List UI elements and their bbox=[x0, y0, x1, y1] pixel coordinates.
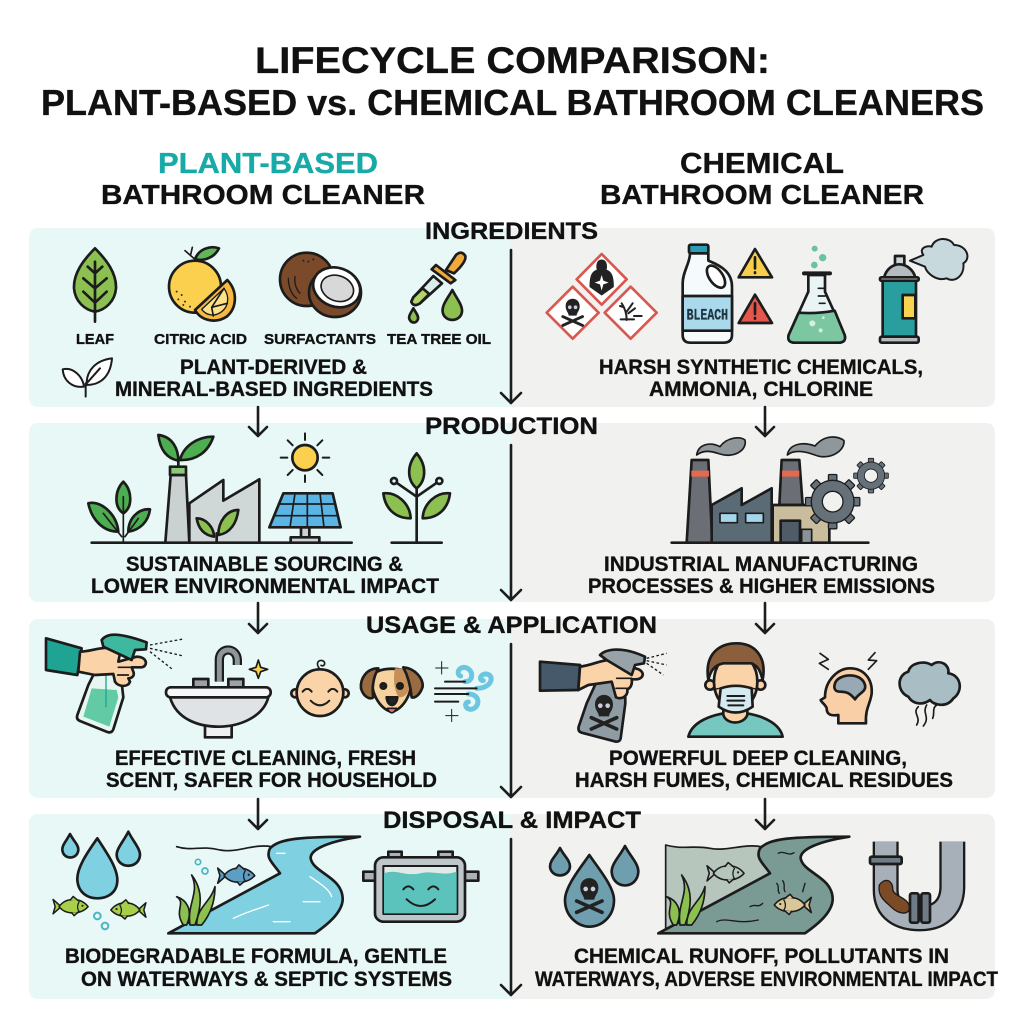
text: sustainable sourcing: LOWER ENVIRONMENTAL IMPACT bbox=[91, 575, 439, 598]
icon: bleach bottle: BLEACH bbox=[687, 307, 728, 325]
heading: chemical column bbox=[600, 148, 924, 210]
icon: fresh air wind bbox=[435, 662, 491, 722]
icon: polluting factory bbox=[687, 437, 844, 543]
icon: hazard diamonds bbox=[547, 254, 657, 339]
icon: polluted river bbox=[658, 837, 849, 933]
text: effective cleaning: EFFECTIVE CLEANING, FRESH bbox=[115, 747, 416, 770]
heading: plant-based column: BATHROOM CLEANER bbox=[101, 179, 425, 210]
icon: person with mask bbox=[688, 643, 783, 737]
icon: baby bbox=[291, 660, 349, 716]
panel: chemical disposal bbox=[511, 814, 998, 999]
section label: production: PRODUCTION bbox=[425, 413, 598, 440]
labels: ingredients bbox=[76, 331, 491, 348]
text: chemical runoff: CHEMICAL RUNOFF, POLLUTANTS IN bbox=[574, 945, 949, 968]
icon: dog bbox=[361, 667, 423, 713]
icon: green factory bbox=[158, 435, 259, 543]
icon: hand with green spray bottle bbox=[46, 635, 183, 732]
icon: seedling bbox=[383, 453, 450, 543]
section label: ingredients: INGREDIENTS bbox=[425, 218, 598, 245]
arrows: left column steps bbox=[249, 407, 267, 829]
text: sustainable sourcing: SUSTAINABLE SOURCING & bbox=[126, 553, 403, 576]
icon: toxic drops bbox=[550, 846, 638, 927]
icon: sprout outline bbox=[63, 358, 112, 397]
title: PLANT-BASED vs. CHEMICAL BATHROOM CLEANERS bbox=[41, 82, 984, 123]
heading: chemical column: BATHROOM CLEANER bbox=[600, 179, 924, 210]
title bbox=[41, 40, 984, 123]
text: biodegradable formula: BIODEGRADABLE FORMULA, GENTLE bbox=[65, 945, 447, 968]
text: chemical runoff bbox=[535, 945, 998, 991]
icon: leaf bbox=[74, 248, 116, 322]
icon: clean river with fish bbox=[168, 837, 360, 933]
panel: plant-based disposal bbox=[29, 814, 511, 999]
panel: chemical ingredients bbox=[511, 228, 995, 407]
panel: plant-based production bbox=[29, 423, 511, 602]
text: harsh chemicals bbox=[599, 356, 923, 401]
icon: plant bbox=[88, 482, 150, 543]
icon: citric acid lemon bbox=[169, 247, 235, 321]
text: industrial manufacturing: INDUSTRIAL MANUFACTURING bbox=[604, 553, 918, 576]
text: effective cleaning: SCENT, SAFER FOR HOUSEHOLD bbox=[106, 769, 437, 792]
icon: clogged pipe bbox=[870, 842, 952, 923]
title: LIFECYCLE COMPARISON: bbox=[255, 40, 770, 81]
icon: spray can with cloud bbox=[880, 239, 967, 343]
labels: ingredients: LEAF bbox=[76, 331, 114, 348]
text: biodegradable formula bbox=[65, 945, 452, 991]
ground line bbox=[672, 539, 868, 547]
section label: usage and application: USAGE & APPLICATION bbox=[366, 612, 657, 639]
text: biodegradable formula: ON WATERWAYS & SEPTIC SYSTEMS bbox=[81, 968, 452, 991]
icon: septic tank bbox=[363, 852, 478, 922]
heading: chemical column: CHEMICAL bbox=[680, 148, 844, 180]
text: industrial manufacturing bbox=[588, 553, 935, 598]
heading: plant-based column: PLANT-BASED bbox=[158, 148, 378, 180]
text: industrial manufacturing: PROCESSES & HIGHER EMISSIONS bbox=[588, 575, 935, 598]
heading: plant-based column bbox=[101, 148, 425, 210]
panel: chemical production bbox=[511, 423, 995, 602]
icon: sink bbox=[166, 650, 271, 737]
icon: head with brain bbox=[819, 653, 877, 723]
text: powerful cleaning bbox=[575, 747, 953, 792]
icon: water drops and fish bbox=[53, 832, 146, 929]
icon: warning triangles bbox=[739, 249, 772, 323]
icon: sun bbox=[281, 433, 329, 482]
icon: flask bbox=[788, 246, 845, 343]
panel: plant-based usage bbox=[29, 619, 511, 798]
section label: disposal and impact: DISPOSAL & IMPACT bbox=[383, 807, 641, 834]
labels: ingredients: SURFACTANTS bbox=[264, 331, 376, 348]
icon: hand with toxic spray bottle bbox=[540, 650, 667, 742]
text: plant-derived ingredients bbox=[115, 356, 433, 401]
icon: tea tree oil dropper bbox=[409, 253, 465, 323]
icon: bleach bottle bbox=[683, 245, 732, 343]
text: sustainable sourcing bbox=[91, 553, 439, 598]
text: effective cleaning bbox=[106, 747, 437, 792]
text: plant-derived ingredients: PLANT-DERIVED & bbox=[180, 356, 367, 379]
icon: fume cloud bbox=[900, 662, 960, 726]
ground line bbox=[92, 539, 442, 547]
text: powerful cleaning: HARSH FUMES, CHEMICAL RESIDUES bbox=[575, 769, 953, 792]
labels: ingredients: TEA TREE OIL bbox=[387, 331, 491, 348]
panel: chemical usage bbox=[511, 619, 995, 798]
text: harsh chemicals: HARSH SYNTHETIC CHEMICALS, bbox=[599, 356, 923, 379]
text: harsh chemicals: AMMONIA, CHLORINE bbox=[649, 378, 873, 401]
icon: surfactants coconut bbox=[280, 253, 366, 317]
icon: solar panel bbox=[269, 493, 341, 543]
labels: ingredients: CITRIC ACID bbox=[154, 331, 247, 348]
panel: plant-based ingredients bbox=[29, 228, 511, 407]
text: powerful cleaning: POWERFUL DEEP CLEANING, bbox=[609, 747, 907, 770]
text: plant-derived ingredients: MINERAL-BASED INGREDIENTS bbox=[115, 378, 433, 401]
icon: gears bbox=[806, 458, 888, 529]
arrows: central flow bbox=[501, 250, 521, 995]
arrows: right column steps bbox=[756, 407, 774, 829]
